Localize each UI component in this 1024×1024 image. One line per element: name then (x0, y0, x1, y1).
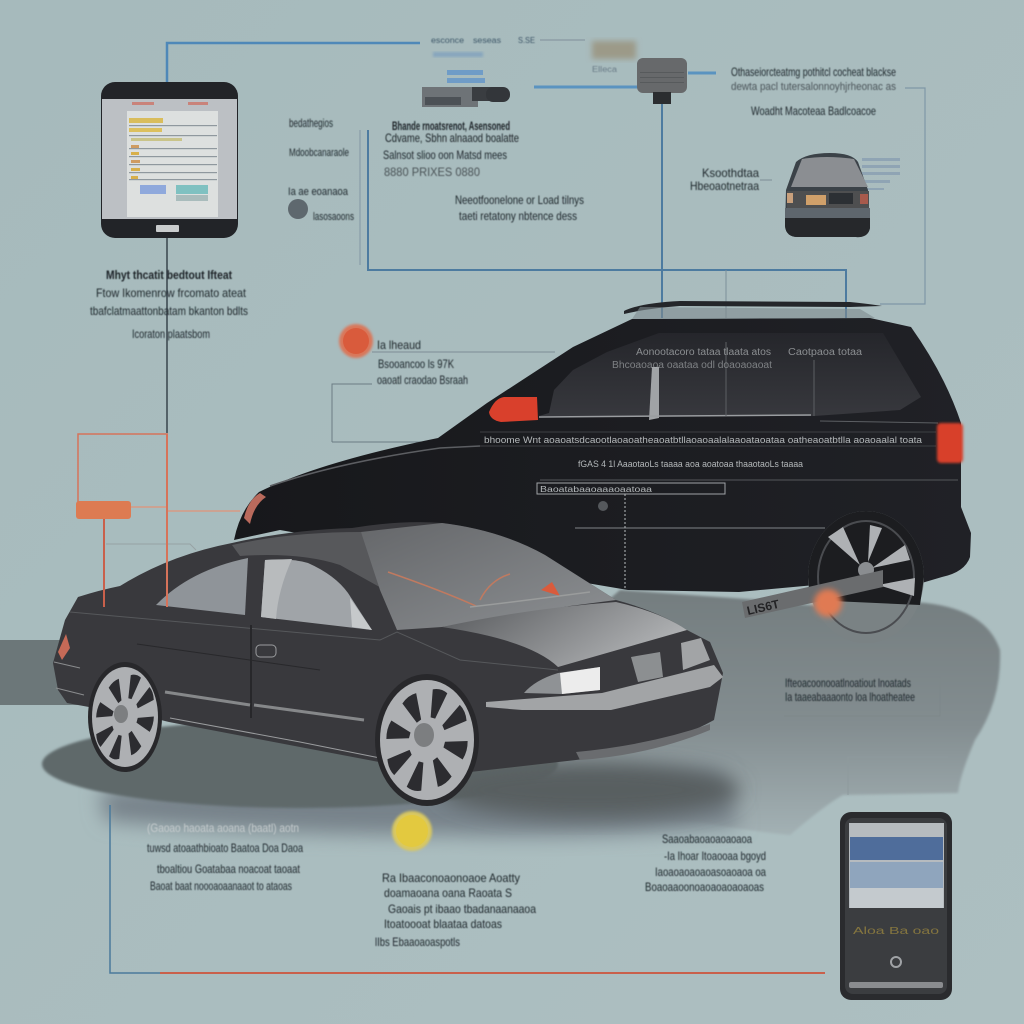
windshield (361, 523, 616, 630)
orange module with bracket (76, 434, 240, 550)
SUV rear wheel (808, 511, 924, 643)
text block: bottom right: -Ia Ihoar Itoaooaa bgoyd (664, 849, 766, 863)
body text strips (484, 347, 922, 494)
icon: handheld scanner (840, 812, 952, 1000)
top label row: S.SE (518, 36, 535, 45)
text block: right info box: Ifteoacoonooatlnoatiout lnoatads (785, 676, 911, 690)
body text strips: fGAS 4 1l AaaotaoLs taaaa aoa aoatoaa thaaotaoLs taaaa (578, 459, 803, 469)
side windows (539, 333, 921, 416)
text block: center specification: Bhande rnoatsrenot, Asensoned (392, 119, 510, 133)
door lines (70, 612, 558, 670)
sedan front wheel (374, 674, 480, 806)
text block: bottom left (147, 821, 303, 893)
text block: bottom right: Boaoaaoonoaoaoaoaoaoas (645, 880, 764, 894)
connector lines: blue (167, 40, 925, 442)
text block: left of tablet caption: Icoraton plaatsbom (132, 327, 210, 341)
text block: warning label: oaoatl craodao Bsraah (377, 373, 468, 387)
text block: right info box (784, 676, 948, 795)
text block: bottom left: Baoat baat noooaoaanaaot to ataoas (150, 879, 292, 893)
text block: bottom center: Itoatoooat blaataa datoas (384, 917, 502, 931)
text block: center specification: Salnsot slioo oon Matsd mees (383, 148, 507, 162)
text block: center specification: taeti retatony nbtence dess (459, 209, 577, 223)
text block: bottom center: doamaoana oana Raoata S (384, 886, 512, 900)
text block: left of tablet caption: Mhyt thcatit bedtout Ifteat (106, 268, 232, 282)
text block: bottom center: Ra Ibaaconoaonoaoe Aoatty (382, 871, 520, 885)
sedan rear wheel (86, 662, 164, 772)
body text strips: Caotpaoa totaa (788, 347, 862, 358)
roof rail (624, 301, 882, 314)
indicator: orange dot (339, 324, 373, 358)
text block: center specification: 8880 PRIXES 0880 (384, 165, 480, 179)
grille (631, 652, 663, 682)
text block: left column labels: Mdoobcanaraole (289, 147, 349, 159)
text block: rear vehicle caption: Ksoothdtaa (702, 166, 759, 180)
text block: sensor description: Othaseiorcteatmg pothitcl cocheat blackse (731, 65, 896, 79)
text block: left column labels: lasosaoons (313, 211, 354, 223)
roof panel (232, 532, 385, 590)
icon: small badge (288, 199, 308, 219)
connector lines: red and bottom (104, 434, 825, 974)
text block: right info box: Ia taaeabaaaonto loa lhoatheatee (785, 690, 915, 704)
windshield wiring (388, 572, 510, 606)
ground shadow (0, 590, 1000, 836)
text block: bottom left: tuwsd atoaathbioato Baatoa Doa Daoa (147, 841, 303, 855)
icon: small rear view vehicle (785, 153, 900, 237)
text block: rear vehicle caption (690, 166, 759, 193)
top label row (431, 36, 618, 74)
text block: left column labels (288, 116, 354, 223)
side windows (156, 558, 248, 615)
top label row: Elleca (592, 65, 618, 74)
text block: center specification: Cdvame, Sbhn alnaaod boalatte (385, 131, 519, 145)
icon: tablet with report (101, 82, 238, 238)
text block: rear vehicle caption: Hbeoaotnetraa (690, 179, 759, 193)
text block: sensor description: dewta pacl tutersalonnoyhjrheonac as (731, 81, 896, 93)
text block: center specification (383, 119, 584, 223)
text block: sensor description: Woadht Macoteaa Badlcoacoe (751, 104, 876, 118)
body text strips: bhoome Wnt aoaoatsdcaootlaoaoatheaoatbtllaoaoaalalaaoataoataa oatheaoatbtlla aoaoaalal toata (484, 435, 922, 445)
sedan vehicle (53, 522, 723, 772)
hood (442, 602, 687, 667)
icon: sensor module (592, 41, 687, 104)
top label row: esconce (431, 36, 465, 45)
headlight (524, 667, 600, 694)
icon: handheld scanner: Aloa Ba oao (853, 926, 940, 937)
top label row: seseas (473, 36, 501, 45)
text block: warning label (377, 338, 468, 387)
text block: bottom right (645, 832, 766, 894)
text block: warning label: Ia lheaud (377, 338, 421, 352)
scanner strip on SUV: LIS6T (746, 597, 781, 618)
text block: warning label: Bsooancoo ls 97K (378, 357, 454, 371)
body highlight line (270, 446, 480, 486)
bumper (486, 665, 723, 710)
text block: bottom left: (Gaoao haoata aoana (baatl) aotn (147, 821, 299, 835)
indicator: yellow dot (392, 811, 432, 851)
text block: bottom center: lIbs Ebaaoaoaspotls (375, 935, 460, 949)
body text strips: Bhcoaoaoa oaataa odl doaoaoaoat (612, 360, 772, 371)
text block: left of tablet caption: Ftow Ikomenrow frcomato ateat (96, 286, 247, 300)
text block: bottom right: Iaoaoaoaoaoasoaoaoa oa (655, 865, 766, 879)
body text strips: Baoatabaaoaaaoaatoaa (540, 485, 653, 494)
rear tail light (937, 423, 963, 463)
text block: left column labels: bedathegios (289, 116, 333, 130)
scanner strip on SUV (742, 570, 883, 618)
tail light red (489, 397, 538, 422)
text block: left of tablet caption (90, 268, 248, 341)
text block: sensor description (731, 65, 896, 118)
icon: OBD connector (422, 52, 510, 107)
text block: left of tablet caption: tbafclatmaattonbatam bkanton bdlts (90, 304, 248, 318)
text block: bottom left: tboaltiou Goatabaa noacoat taoaat (157, 862, 301, 876)
text block: bottom center (375, 871, 536, 949)
text block: left column labels: Ia ae eoanaoa (288, 186, 349, 198)
body text strips: Aonootacoro tataa tlaata atos (636, 347, 771, 358)
text block: bottom right: Saaoabaoaoaoaoaoa (662, 832, 752, 846)
SUV vehicle (234, 301, 971, 592)
text block: center specification: Neeotfoonelone or Load tilnys (455, 193, 584, 207)
text block: bottom center: Gaoais pt ibaao tbadanaanaaoa (388, 902, 536, 916)
